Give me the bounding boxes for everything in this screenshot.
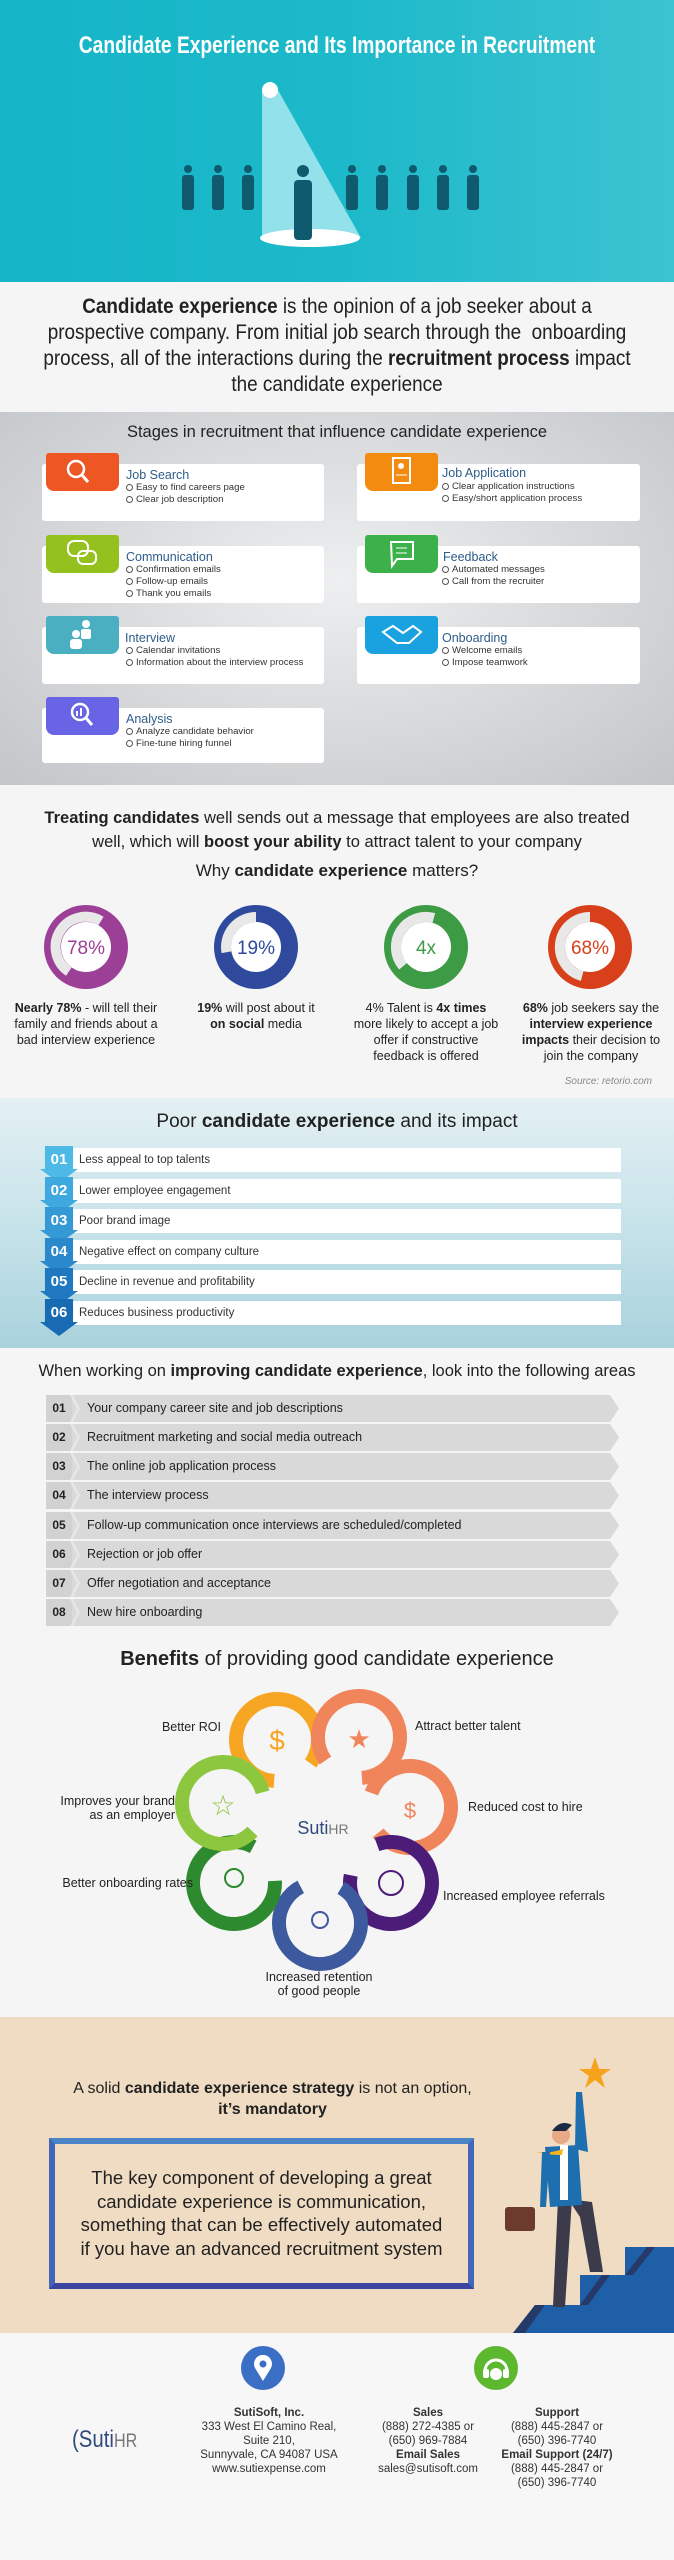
chart: benefits flower: SutiHR (297, 1818, 349, 1838)
contact: address: SutiSoft, Inc. (234, 2407, 304, 2419)
callout box: if you have an advanced recruitment system (81, 2238, 442, 2258)
benefit labels: Increased employee referrals (443, 1889, 605, 1903)
panel: stages in recruitment (0, 412, 674, 785)
improvement areas list: 02 (52, 1430, 66, 1444)
improvement areas list: 04 (52, 1488, 66, 1502)
benefit labels: of good people (278, 1984, 360, 1998)
intro text block (43, 295, 631, 396)
benefit labels: Improves your brand (60, 1794, 175, 1808)
card: Feedback (357, 535, 640, 603)
card: Interview: Information about the interview process (136, 657, 303, 668)
panel: mandatory strategy (0, 2017, 674, 2333)
callout box: something that can be effectively automated (81, 2214, 442, 2235)
chart: donut stats (44, 905, 632, 989)
improvement areas list: 07 (52, 1576, 66, 1590)
improvement areas list: New hire onboarding (87, 1605, 202, 1619)
stat label 78%: Nearly 78% - will tell their family and friends about a bad interview experience (14, 1001, 158, 1047)
card: Feedback: Call from the recruiter (452, 576, 544, 587)
source note: Source: retorio.com (565, 1076, 652, 1087)
intro text block: Candidate experience is the opinion of a job seeker about a (82, 295, 592, 318)
chart: benefits flower: ★ (347, 1724, 371, 1754)
impact list: Decline in revenue and profitability (79, 1276, 255, 1288)
callout box (49, 2138, 474, 2289)
card: Communication: Follow-up emails (136, 576, 208, 587)
impact list: 04 (51, 1243, 67, 1260)
stat label 19%: on social media (210, 1017, 302, 1031)
callout box: The key component of developing a great (91, 2167, 432, 2188)
improvement areas list: 01 (52, 1401, 66, 1415)
card: Interview (42, 616, 324, 684)
heading: improving candidate experience: When working on improving candidate experience, look into the following areas (38, 1362, 636, 1380)
improvement areas list (46, 1395, 619, 1626)
heading: poor: Poor candidate experience and its impact (156, 1111, 518, 1132)
panel: poor candidate experience (0, 1098, 674, 1348)
contact: support: (888) 445-2847 or (511, 2463, 603, 2475)
contact: sales: (650) 969-7884 (389, 2435, 467, 2447)
intro text block: the candidate experience (231, 373, 443, 396)
text block: treating candidates: well, which will boost your ability to attract talent to your company (92, 833, 582, 851)
benefit labels (60, 1719, 605, 1998)
card: Onboarding: Onboarding (442, 631, 507, 645)
contact: sales: (888) 272-4385 or (382, 2421, 474, 2433)
stat label 4x: 4% Talent is 4x times more likely to accept a job offer if constructive feedback is offered (354, 1001, 498, 1063)
chart: benefits flower: $ (269, 1725, 285, 1756)
benefit labels: Attract better talent (415, 1719, 521, 1733)
benefit labels: Better onboarding rates (62, 1876, 193, 1890)
card: Onboarding: Welcome emails (452, 645, 522, 656)
contact: sales: Sales (413, 2407, 443, 2419)
improvement areas list: Recruitment marketing and social media outreach (87, 1430, 362, 1444)
title: Candidate Experience and Its Importance in Recruitment (79, 32, 595, 59)
contact: support (501, 2407, 613, 2489)
impact list: 05 (51, 1273, 67, 1290)
card: Analysis: Fine-tune hiring funnel (136, 738, 231, 749)
donut 68%: 68% (571, 938, 609, 959)
callout box: candidate experience is communication, (97, 2190, 426, 2212)
stat label 19% (197, 1001, 315, 1031)
donut 68% (548, 905, 632, 989)
stat label 19%: 19% will post about it (197, 1001, 315, 1015)
card: Analysis: Analyze candidate behavior (136, 726, 254, 737)
improvement areas list: The online job application process (87, 1459, 276, 1473)
donut 4x (384, 905, 468, 989)
impact list: Lower employee engagement (79, 1185, 231, 1197)
footer (0, 2333, 674, 2560)
improvement areas list: Rejection or job offer (87, 1547, 202, 1561)
donut 78% (44, 905, 128, 989)
improvement areas list: 06 (52, 1547, 66, 1561)
benefit labels: Reduced cost to hire (468, 1800, 583, 1814)
chart: benefits flower: $ (404, 1798, 416, 1823)
donut 4x: 4x (416, 938, 437, 959)
contact: address: 333 West El Camino Real, (202, 2421, 336, 2433)
contact: support: Support (535, 2407, 579, 2419)
stat label 68%: 68% job seekers say the interview experience impacts their decision to join the company (522, 1001, 660, 1063)
contact: sales: Email Sales (396, 2449, 460, 2461)
intro text block: prospective company. From initial job search through the onboarding (48, 321, 626, 344)
contact: sales: sales@sutisoft.com (378, 2463, 478, 2475)
contact: sales (378, 2407, 478, 2475)
icon: location pin (241, 2346, 285, 2390)
improvement areas list: The interview process (87, 1488, 209, 1502)
contact: support: (650) 396-7740 (518, 2435, 596, 2447)
impact list: Negative effect on company culture (79, 1246, 259, 1258)
improvement areas list: Follow-up communication once interviews are scheduled/completed (87, 1518, 462, 1532)
contact: support: Email Support (24/7) (501, 2449, 613, 2461)
card: Onboarding: Impose teamwork (452, 657, 528, 668)
improvement areas list: Your company career site and job descriptions (87, 1401, 343, 1415)
text block: treating candidates: Treating candidates well sends out a message that employees are also treated (44, 809, 630, 827)
card: Interview: Interview (125, 631, 175, 645)
improvement areas list: 03 (52, 1459, 66, 1473)
contact: support: (650) 396-7740 (518, 2477, 596, 2489)
donut 78%: 78% (67, 938, 105, 959)
impact list: Reduces business productivity (79, 1307, 234, 1319)
improvement areas list: Offer negotiation and acceptance (87, 1576, 271, 1590)
donut 19%: 19% (237, 938, 275, 959)
impact list: 06 (51, 1304, 67, 1321)
contact: address (200, 2407, 338, 2475)
card: Analysis (42, 697, 324, 763)
impact list: Poor brand image (79, 1215, 170, 1227)
text: solid strategy: it’s mandatory (218, 2101, 327, 2118)
donut 19% (214, 905, 298, 989)
text: solid strategy (73, 2080, 472, 2118)
card: Job Search (42, 453, 324, 521)
card: Communication: Communication (126, 550, 213, 564)
illustration: spotlight and people (182, 82, 479, 247)
card: Communication: Thank you emails (136, 588, 211, 599)
card: Analysis: Analysis (126, 712, 173, 726)
benefit labels: Increased retention (265, 1970, 372, 1984)
impact list: Less appeal to top talents (79, 1154, 210, 1166)
benefit labels: as an employer (90, 1808, 175, 1822)
intro text block: process, all of the interactions during the recruitment process impact (43, 347, 631, 370)
illustration: person climbing stairs (505, 2057, 674, 2333)
card: Onboarding (357, 616, 640, 684)
card: Interview: Calendar invitations (136, 645, 220, 656)
contact: address: Suite 210, (243, 2435, 295, 2447)
improvement areas list: 08 (52, 1605, 66, 1619)
impact list (40, 1146, 621, 1336)
chart: benefits flower: ☆ (210, 1790, 236, 1821)
card: Job Application: Job Application (442, 466, 526, 480)
chart: benefits flower (175, 1689, 458, 1971)
heading: benefits: Benefits of providing good candidate experience (120, 1648, 554, 1670)
improvement areas list: 05 (52, 1518, 66, 1532)
card: Communication (42, 535, 324, 603)
card: Job Search: Easy to find careers page (136, 482, 245, 493)
card: Job Application (357, 453, 640, 521)
contact: support: (888) 445-2847 or (511, 2421, 603, 2433)
hero: teal banner (0, 0, 674, 282)
card: Feedback: Feedback (443, 550, 498, 564)
impact list: 02 (51, 1182, 67, 1199)
impact list: 01 (51, 1151, 67, 1168)
icon: headset support (474, 2346, 518, 2390)
heading: why candidate experience matters: Why candidate experience matters? (196, 861, 478, 880)
card: Job Search: Clear job description (136, 494, 223, 505)
card: Job Search: Job Search (126, 468, 189, 482)
text: solid strategy: A solid candidate experience strategy is not an option, (73, 2080, 472, 2097)
card: Feedback: Automated messages (452, 564, 545, 575)
contact: address: Sunnyvale, CA 94087 USA (200, 2449, 338, 2461)
impact list: 03 (51, 1212, 67, 1229)
logo: SutiHR: (SutiHR (72, 2426, 137, 2453)
text block: treating candidates (44, 809, 630, 851)
contact: address: www.sutiexpense.com (212, 2463, 326, 2475)
card: Job Application: Clear application instructions (452, 481, 575, 492)
card: Job Application: Easy/short application process (452, 493, 582, 504)
card: Communication: Confirmation emails (136, 564, 221, 575)
heading: stages: Stages in recruitment that influence candidate experience (127, 423, 547, 441)
benefit labels: Better ROI (162, 1720, 221, 1734)
